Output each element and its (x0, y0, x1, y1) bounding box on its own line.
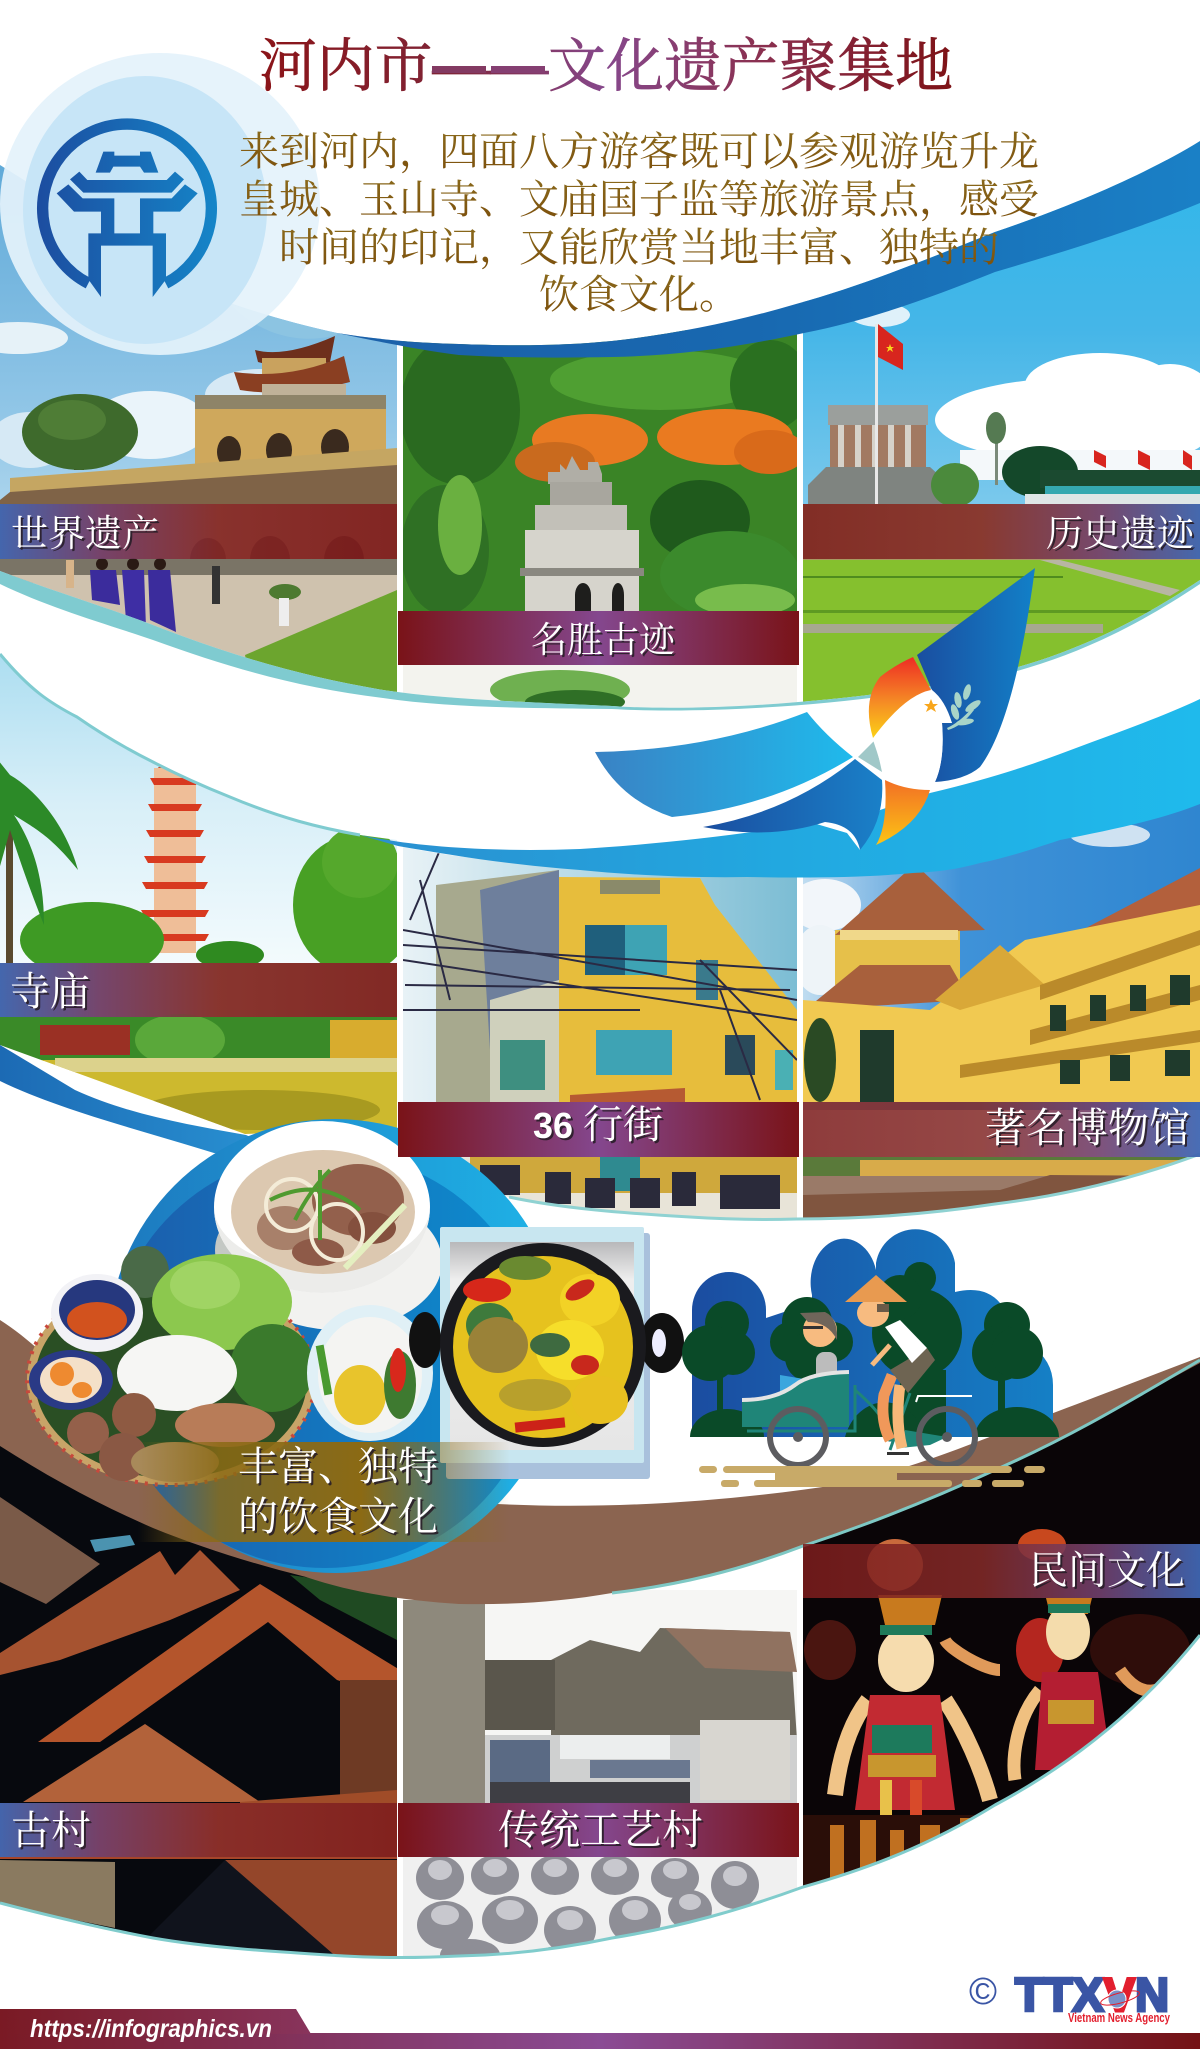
motion dashes (699, 1466, 1045, 1487)
logo: TTXVN agency mark (969, 1968, 1171, 2025)
photo: scenic turtle tower (400, 330, 810, 714)
dove right wing (917, 568, 1035, 782)
dove body (873, 690, 952, 790)
dove orange head wing (869, 657, 931, 738)
logo: Hanoi emblem in pale circles (0, 53, 320, 355)
caption: rich and unique food culture (138, 1442, 510, 1542)
text block: introduction: 时间的印记，又能欣赏当地丰富、独特的 (279, 225, 999, 270)
caption: famous museums (803, 1102, 1200, 1157)
caption: rich and unique food culture: 丰富、独特 (238, 1444, 438, 1489)
photo: ancient village roofs (0, 1446, 397, 1956)
dove orange tail (876, 780, 930, 845)
dove upper left wing (595, 712, 853, 817)
cyclo cab (742, 1372, 975, 1465)
swoosh: blue band lower left (0, 1045, 300, 1160)
caption: temples (0, 963, 397, 1017)
food illustration: blue circle with dishes (27, 1119, 684, 1573)
dove star (924, 699, 938, 712)
caption: folk culture: 民间文化 (1029, 1550, 1185, 1593)
edge: teal line above the temple photo (0, 654, 360, 835)
caption: ancient villages: 古村 (11, 1808, 91, 1853)
trees (682, 1262, 1059, 1437)
edge: teal line below the second photo row (509, 1154, 1200, 1219)
caption: world heritage: 世界遗产 (11, 513, 159, 555)
driver (845, 1275, 935, 1455)
text block: introduction: 来到河内，四面八方游客既可以参观游览升龙 (239, 129, 1039, 174)
tray with bun cha (27, 1246, 315, 1485)
dove lower left wing (703, 759, 882, 850)
plated clay pot (409, 1227, 684, 1479)
caption: historic sites (803, 504, 1200, 559)
photo: historic mausoleum square (803, 150, 1200, 714)
edge: teal line below the third photo row (0, 1635, 1200, 1958)
swoosh: cyan band under the dove (360, 699, 1200, 878)
dove olive branch (947, 683, 982, 730)
blue backing circle (108, 1119, 562, 1573)
text block: introduction: 饮食文化。 (539, 272, 739, 317)
caption: historic sites: 历史遗迹 (1046, 513, 1195, 555)
caption: traditional craft villages (398, 1803, 799, 1857)
caption: rich and unique food culture: 的饮食文化 (238, 1494, 438, 1539)
text block: introduction (239, 129, 1039, 317)
footer band (0, 2009, 1200, 2049)
photo: famous museum (803, 804, 1200, 1218)
panel: white header with blue swoosh (0, 0, 1200, 358)
caption: traditional craft villages: 传统工艺村 (498, 1807, 703, 1853)
copyright symbol: © (969, 1971, 997, 2013)
caption: ancient villages (0, 1803, 397, 1857)
dove small triangle (858, 740, 882, 772)
caption: scenic sites: 名胜古迹 (531, 620, 676, 660)
illustration: cyclo rider (682, 1229, 1059, 1487)
photo: 36 old streets (403, 820, 797, 1222)
photo: traditional craft village (403, 1590, 797, 1974)
passenger (780, 1312, 837, 1400)
TTXVN wordmark: TTXVN (1015, 1968, 1169, 2021)
photo: temple pagoda (0, 656, 397, 1134)
photo: water puppet folk culture (803, 1340, 1200, 1915)
globe (1099, 1988, 1141, 2008)
small fish bowl (307, 1305, 433, 1441)
pho bowl (214, 1121, 442, 1330)
caption: 36 streets: 36 行街 (533, 1102, 663, 1147)
title: 河内市——文化遗产聚集地 (259, 34, 953, 99)
caption: folk culture (803, 1544, 1200, 1598)
text block: introduction: 皇城、玉山寺、文庙国子监等旅游景点，感受 (239, 177, 1039, 222)
caption: temples: 寺庙 (10, 969, 90, 1014)
caption: 36 streets (398, 1102, 799, 1157)
caption: scenic sites (398, 611, 799, 665)
blue hills (692, 1229, 1053, 1437)
swoosh: brown road band (0, 1320, 1200, 1604)
website link: https://infographics.vn (30, 2015, 272, 2043)
band: teal curved edge of the first photo row (0, 571, 1200, 710)
caption: famous museums: 著名博物馆 (985, 1105, 1190, 1151)
photo: world heritage citadel (0, 160, 397, 700)
caption: world heritage (0, 504, 397, 559)
icon: peace dove (595, 568, 1035, 850)
